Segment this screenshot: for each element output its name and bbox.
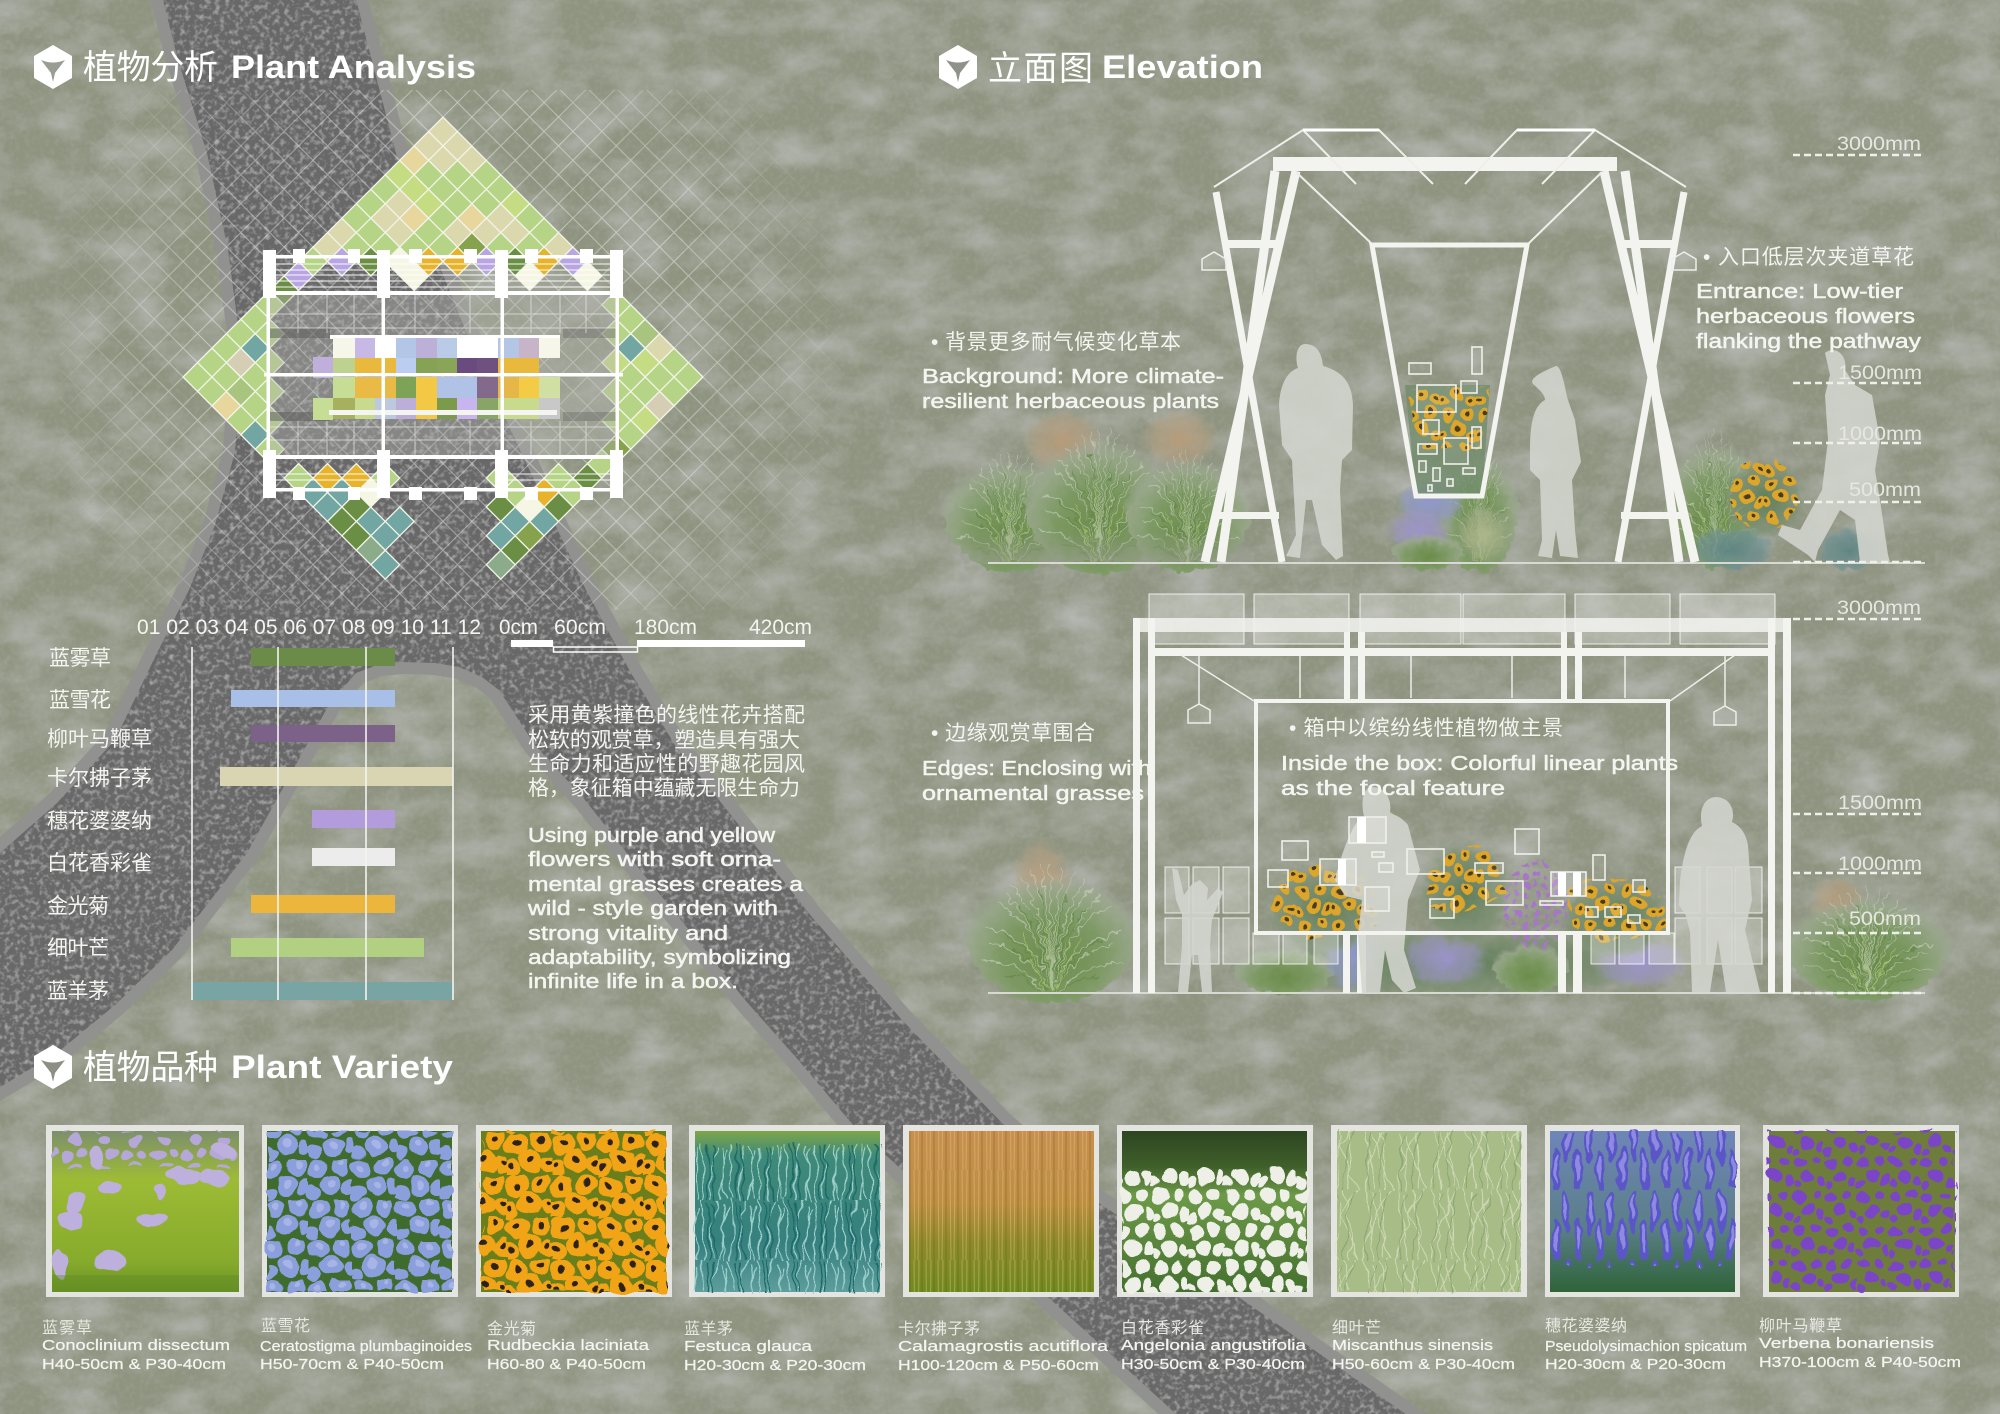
coloured plant cells	[183, 117, 703, 579]
background: asphalt pathway	[0, 0, 1434, 1414]
plant name labels	[47, 647, 152, 1003]
heading: elevation: 立面图	[988, 50, 1093, 88]
heading: plant analysis	[34, 45, 476, 89]
text block: concept description: 格，象征箱中蕴藏无限生命力	[528, 777, 800, 800]
caption: Festuca: 蓝羊茅	[684, 1320, 733, 1338]
pergola frame	[1133, 618, 1791, 993]
annotation: background: Background: More climate-	[922, 366, 1224, 388]
plan diagram: diamond planting grid	[60, 90, 840, 610]
translucent top panels	[1149, 594, 1775, 644]
plant name labels: 蓝雾草	[49, 647, 111, 670]
caption: Rudbeckia: 金光菊	[487, 1320, 536, 1338]
plant name labels: 柳叶马鞭草	[47, 728, 152, 751]
card: Rudbeckia	[476, 1125, 672, 1297]
caption: Pseudolysimachion: H20-30cm & P20-30cm	[1545, 1356, 1726, 1373]
scale bar: 420cm	[749, 616, 812, 639]
caption: Pseudolysimachion: Pseudolysimachion spicatum	[1545, 1338, 1747, 1355]
month axis: 01 02 03 04 05 06 07 08 09 10 11 12	[137, 616, 481, 639]
icon: hexagon	[34, 45, 72, 89]
annotation: entrance: flanking the pathway	[1696, 331, 1921, 353]
lattice grid lines	[60, 90, 840, 610]
text block: concept description: 采用黄紫撞色的线性花卉搭配	[528, 704, 805, 727]
caption: Angelonia: Angelonia angustifolia	[1121, 1337, 1307, 1354]
caption: Verbena: Verbena bonariensis	[1759, 1335, 1934, 1352]
heading: plant variety	[34, 1045, 453, 1089]
plants: box planting	[1225, 834, 1695, 996]
caption: Miscanthus	[1332, 1319, 1515, 1373]
text block: concept description: wild - style garden with	[527, 898, 778, 920]
annotation: inside box: • 箱中以缤纷线性植物做主景	[1289, 717, 1563, 740]
silhouette: woman	[1530, 366, 1581, 558]
annotation: inside box: Inside the box: Colorful linear plants	[1281, 753, 1678, 775]
ground line	[988, 992, 1925, 994]
plant name labels: 细叶芒	[47, 937, 109, 960]
caption: Ceratostigma: 蓝雪花	[261, 1317, 310, 1335]
text block: concept description: 松软的观赏草，塑造具有强大	[528, 729, 800, 752]
card: Angelonia	[1117, 1125, 1313, 1297]
elevation 1: side section	[922, 130, 1925, 574]
caption: Miscanthus: Miscanthus sinensis	[1332, 1337, 1493, 1354]
text block: concept description: mental grasses creates a	[528, 874, 804, 896]
text block: concept description	[527, 704, 805, 993]
translucent lower panels	[1165, 867, 1762, 964]
suspended planter with flowers	[1372, 245, 1527, 496]
caption: Verbena: 柳叶马鞭草	[1759, 1317, 1842, 1335]
caption: Conoclinium: Conoclinium dissectum	[42, 1337, 230, 1354]
caption: Rudbeckia: H60-80 & P40-50cm	[487, 1356, 646, 1373]
plants: right rudbeckia	[1730, 455, 1799, 530]
central box frame and inset squares	[1256, 701, 1668, 933]
plant name labels: 金光菊	[47, 895, 109, 918]
text block: concept description: adaptability, symbolizing	[528, 947, 791, 969]
caption: Pseudolysimachion	[1545, 1317, 1747, 1373]
annotation: inside box: as the focal feature	[1281, 778, 1505, 800]
annotation: background: • 背景更多耐气候变化草本	[931, 331, 1181, 354]
heading: elevation	[939, 45, 1263, 89]
dimension marks: 500mm	[1849, 909, 1921, 930]
annotation: edges	[922, 722, 1151, 805]
caption: Conoclinium	[42, 1319, 230, 1373]
text block: concept description: infinite life in a box.	[528, 971, 738, 993]
annotation: edges: ornamental grasses	[922, 783, 1144, 805]
card: Calamagrostis	[903, 1125, 1099, 1297]
heading: plant variety: 植物品种	[83, 1049, 218, 1087]
scale bar	[499, 616, 812, 652]
caption: Miscanthus: H50-60cm & P30-40cm	[1332, 1356, 1515, 1373]
card: Festuca	[689, 1125, 885, 1297]
plant photo cards	[46, 1125, 1959, 1297]
caption: Festuca	[684, 1320, 866, 1374]
caption: Pseudolysimachion: 穗花婆婆纳	[1545, 1317, 1627, 1335]
scale bar: 0cm	[499, 616, 538, 639]
dimension marks: 1500mm	[1838, 793, 1922, 814]
plant name labels: 蓝雪花	[49, 689, 111, 712]
caption: Miscanthus: 细叶芒	[1332, 1319, 1381, 1337]
dimension marks	[1793, 134, 1922, 562]
text block: concept description: strong vitality and	[528, 923, 728, 945]
silhouette: man	[1279, 344, 1353, 560]
caption: Calamagrostis: H100-120cm & P50-60cm	[898, 1357, 1099, 1374]
plant name labels: 卡尔拂子茅	[47, 767, 152, 790]
heading: elevation: Elevation	[1102, 49, 1263, 85]
annotation: edges: • 边缘观赏草围合	[931, 722, 1095, 745]
pergola frame	[1202, 130, 1696, 562]
caption: Angelonia	[1121, 1319, 1307, 1373]
dimension marks	[1793, 598, 1922, 993]
caption: Verbena: H370-100cm & P40-50cm	[1759, 1354, 1961, 1371]
card: Pseudolysimachion	[1545, 1125, 1740, 1297]
elevation 2: front section	[922, 594, 1951, 1002]
card: Ceratostigma	[262, 1125, 458, 1297]
caption: Calamagrostis: Calamagrostis acutiflora	[898, 1338, 1109, 1355]
plant name labels: 白花香彩雀	[47, 852, 152, 875]
scale bar: 180cm	[634, 616, 697, 639]
plants: central lower	[1384, 437, 1519, 573]
plants: right group	[1664, 427, 1886, 570]
structure interior	[270, 295, 617, 455]
dimension marks: 1000mm	[1838, 424, 1922, 445]
silhouette: centre man	[1335, 787, 1420, 993]
icon: hexagon	[34, 1045, 72, 1089]
text block: concept description: flowers with soft orna-	[528, 849, 781, 871]
card: Verbena	[1763, 1125, 1959, 1297]
flowering bars	[192, 648, 453, 1000]
central planter colour blocks	[313, 335, 560, 420]
caption: Ceratostigma: H50-70cm & P40-50cm	[260, 1356, 444, 1373]
card: Conoclinium	[46, 1125, 244, 1297]
card: Miscanthus	[1331, 1125, 1527, 1297]
silhouette: walker	[1778, 350, 1890, 562]
white pergola structure plan	[263, 249, 623, 500]
hanging lamps	[1188, 704, 1736, 725]
silhouette: right man	[1679, 797, 1760, 992]
annotation: background	[922, 331, 1224, 413]
dimension marks: 3000mm	[1837, 134, 1921, 155]
silhouette: child	[1172, 868, 1223, 992]
scale bar: 60cm	[554, 616, 606, 639]
caption: Ceratostigma: Ceratostigma plumbaginoides	[260, 1338, 472, 1355]
caption: Calamagrostis: 卡尔拂子茅	[898, 1320, 980, 1338]
dimension marks: 500mm	[1849, 480, 1921, 501]
caption: Angelonia: H30-50cm & P30-40cm	[1121, 1356, 1305, 1373]
heading: plant analysis: Plant Analysis	[231, 49, 476, 85]
plant captions	[42, 1317, 1961, 1374]
dimension marks: 1500mm	[1838, 363, 1922, 384]
annotation: entrance: • 入口低层次夹道草花	[1703, 246, 1914, 269]
annotation: inside box	[1281, 717, 1678, 800]
heading: plant variety: Plant Variety	[231, 1049, 453, 1085]
annotation: entrance: Entrance: Low-tier	[1696, 281, 1903, 303]
caption: Calamagrostis	[898, 1320, 1109, 1374]
icon: hexagon	[939, 45, 977, 89]
plant name labels: 蓝羊茅	[47, 980, 109, 1003]
annotation: entrance: herbaceous flowers	[1696, 306, 1915, 328]
hanging lamps	[1202, 252, 1696, 270]
caption: Conoclinium: H40-50cm & P30-40cm	[42, 1356, 226, 1373]
text block: concept description: 生命力和适应性的野趣花园风	[528, 753, 805, 776]
dimension marks: 1000mm	[1838, 854, 1922, 875]
ground line	[988, 562, 1925, 564]
caption: Festuca: H20-30cm & P20-30cm	[684, 1357, 866, 1374]
plant name labels: 穗花婆婆纳	[47, 810, 152, 833]
caption: Festuca: Festuca glauca	[684, 1338, 813, 1355]
chart: flowering calendar	[47, 616, 481, 1003]
caption: Verbena	[1759, 1317, 1961, 1371]
plants: rudbeckia clusters	[1272, 846, 1668, 942]
plants: edge grasses	[965, 838, 1951, 1002]
caption: Ceratostigma	[260, 1317, 472, 1373]
caption: Conoclinium: 蓝雾草	[42, 1319, 92, 1337]
dimension marks: 3000mm	[1837, 598, 1921, 619]
caption: Rudbeckia: Rudbeckia laciniata	[487, 1337, 650, 1354]
annotation: background: resilient herbaceous plants	[922, 391, 1219, 413]
caption: Angelonia: 白花香彩雀	[1121, 1319, 1204, 1337]
text block: concept description: Using purple and yellow	[528, 825, 776, 847]
annotation: entrance	[1696, 246, 1921, 353]
heading: plant analysis: 植物分析	[83, 49, 218, 87]
plants: background grasses	[944, 408, 1251, 574]
caption: Rudbeckia	[487, 1320, 650, 1373]
annotation: edges: Edges: Enclosing with	[922, 758, 1151, 780]
